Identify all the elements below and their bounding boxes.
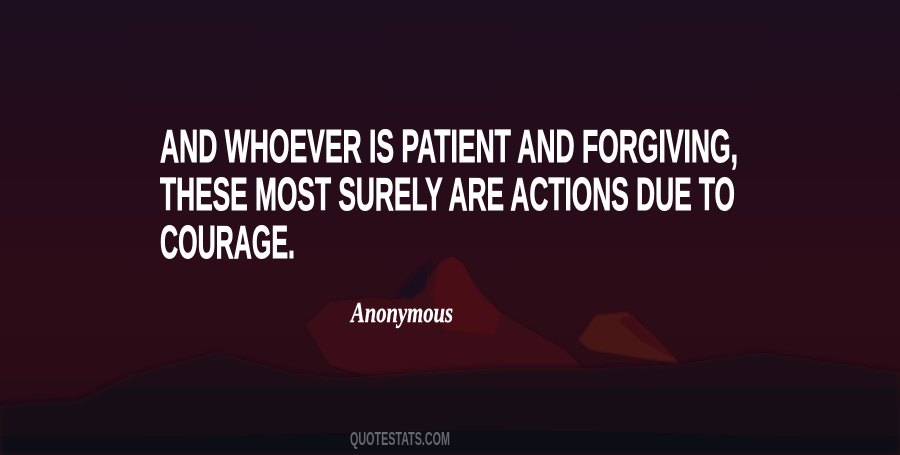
quote text [160,120,738,268]
mountains: red peaks [305,256,680,385]
author signature: Anonymous [350,297,453,329]
mountains: dark foreground ridge [0,352,900,455]
watermark: QUOTESTATS.COM [350,428,450,449]
quote line 3: COURAGE. [160,216,295,268]
